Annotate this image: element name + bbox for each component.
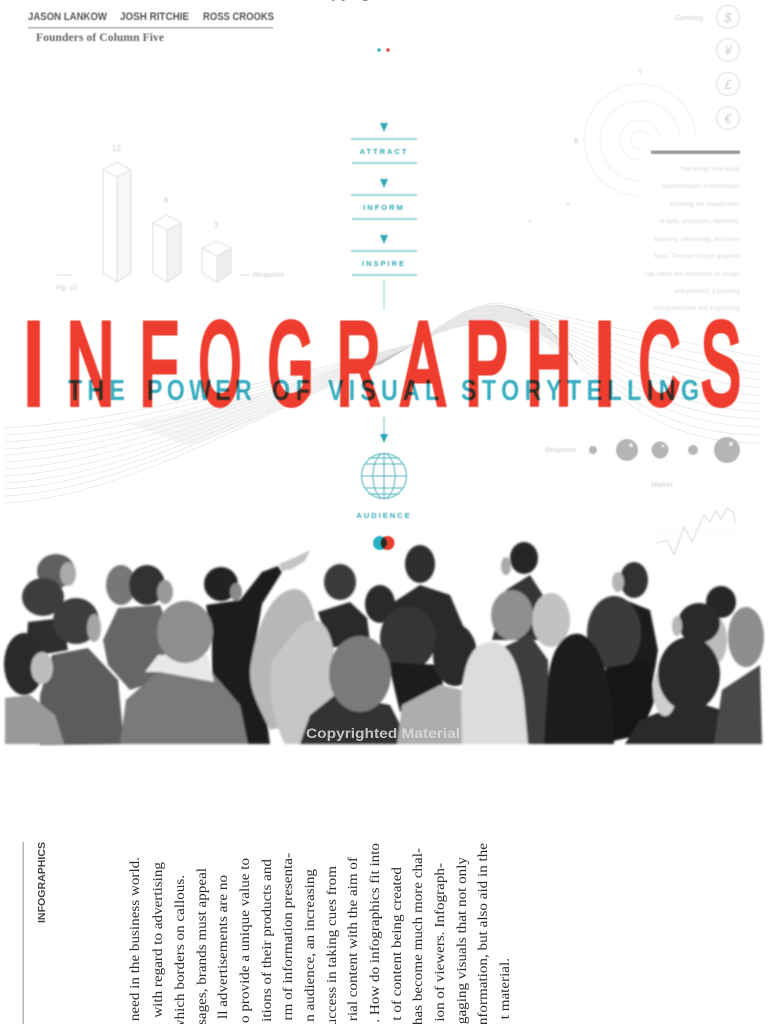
subtitle: the power of visual storytelling: POWER — [147, 373, 252, 407]
subtitle: the power of visual storytelling: THE — [68, 373, 125, 407]
side caption text: anatomy, chronology, and other — [654, 236, 740, 243]
title: INFOGRAPHICS: C — [639, 298, 680, 429]
icon: overlapping circles — [373, 536, 394, 550]
side caption text: representation of information — [661, 183, 741, 190]
dotted spiral chart: $ — [574, 138, 578, 145]
body text, rotated: o provide a unique value to — [238, 858, 253, 1023]
dotted spiral chart — [529, 69, 696, 222]
body text, rotated: nformation, but also aid in the — [476, 843, 491, 1024]
isometric bar chart: 6 — [164, 196, 169, 205]
title: INFOGRAPHICS: N — [66, 298, 114, 429]
currency legend — [675, 6, 740, 130]
isometric bar chart: Fig. 01 — [56, 285, 78, 292]
body text, rotated: need in the business world. — [128, 857, 143, 1021]
side caption text: and patterns, a puzzling — [674, 288, 741, 295]
body text, rotated — [128, 843, 513, 1024]
body text, rotated: t material. — [498, 958, 513, 1019]
currency legend: Currency — [675, 15, 704, 22]
flowing wave ribbon — [5, 303, 760, 503]
grey rule above side caption — [651, 150, 740, 154]
side caption text — [645, 166, 741, 312]
body text, rotated: . How do infographics fit into — [368, 843, 383, 1023]
title: INFOGRAPHICS: I — [593, 298, 617, 429]
women and middle row — [532, 593, 570, 647]
title: INFOGRAPHICS: R — [337, 298, 381, 429]
authors header — [28, 11, 274, 44]
title: INFOGRAPHICS: G — [268, 298, 314, 429]
title: INFOGRAPHICS: I — [22, 298, 46, 429]
authors header: JOSH RITCHIE — [120, 11, 189, 23]
body text, rotated: ll advertisements are no — [216, 875, 231, 1019]
bubble chart — [545, 437, 740, 463]
side caption text: facts. The use of such graphics — [654, 253, 740, 260]
body text, rotated: uccess in taking cues from — [325, 866, 340, 1024]
body text, rotated: sages, brands must appeal — [195, 868, 210, 1024]
currency legend: € — [724, 111, 732, 126]
body text, rotated: gaging visuals that not only — [455, 856, 470, 1024]
body text, rotated: t of content being created — [390, 867, 405, 1021]
title: INFOGRAPHICS: F — [139, 298, 178, 429]
body text, rotated: ion of viewers. Infograph- — [433, 863, 448, 1022]
side caption text: of data, processes, hierarchy, — [659, 218, 740, 225]
subtitle: the power of visual storytelling: VISUAL — [328, 373, 439, 407]
side caption text: comprehensive and engrossing — [654, 305, 741, 312]
body text, rotated: rm of information presenta- — [281, 853, 296, 1020]
currency legend: $ — [723, 10, 732, 25]
body text, rotated: with regard to advertising — [151, 862, 166, 1018]
side caption text: The design and visual — [680, 166, 740, 173]
isometric bar chart: 3 — [214, 221, 219, 230]
running head: INFOGRAPHICS: INFOGRAPHICS — [36, 842, 48, 923]
title: INFOGRAPHICS: O — [199, 298, 241, 429]
isometric bar chart: 12 — [112, 144, 121, 153]
vertical rule on interior page — [22, 842, 24, 1024]
isometric bar chart: Response — [253, 272, 285, 279]
back row — [37, 554, 75, 588]
authors header: ROSS CROOKS — [203, 11, 274, 23]
subtitle: the power of visual storytelling — [68, 373, 699, 407]
photo: audience of people looking up — [4, 542, 764, 745]
title: INFOGRAPHICS — [22, 298, 741, 429]
title: INFOGRAPHICS: P — [465, 298, 508, 429]
flow diagram: attract, inform, inspire: INFORM — [363, 203, 405, 212]
watermark over photo: Copyrighted Material — [306, 725, 460, 741]
currency legend: £ — [723, 77, 732, 92]
authors header: Founders of Column Five — [36, 32, 164, 44]
subtitle: the power of visual storytelling: STORYTELLING — [461, 373, 699, 407]
body text, rotated: rial content with the aim of — [346, 857, 361, 1021]
flow diagram: attract, inform, inspire: INSPIRE — [362, 259, 406, 268]
currency legend: ¥ — [724, 43, 733, 58]
dotted spiral chart: Y — [638, 69, 643, 76]
bubble chart: Response — [545, 447, 577, 454]
body text, rotated: itions of their products and — [260, 859, 275, 1022]
title: INFOGRAPHICS: A — [402, 298, 444, 429]
flow diagram: attract, inform, inspire: ATTRACT — [360, 147, 408, 156]
isometric bar chart — [56, 144, 285, 292]
body text, rotated: has become much more chal- — [411, 848, 426, 1024]
arrow down to audience — [380, 417, 388, 443]
body text, rotated: n audience, an increasing — [303, 869, 318, 1022]
side caption text: can utilize the dimension of visuals — [645, 271, 740, 278]
icon: globe — [362, 453, 406, 499]
subtitle: the power of visual storytelling: OF — [272, 373, 310, 407]
authors header: JASON LANKOW — [28, 11, 108, 23]
front row — [40, 648, 124, 745]
market line chart: Market — [651, 482, 672, 489]
market line chart — [651, 482, 740, 555]
audience label: AUDIENCE — [356, 511, 412, 520]
flow diagram: attract, inform, inspire — [351, 48, 417, 310]
title: INFOGRAPHICS: H — [526, 298, 572, 429]
side caption text: including the visualization — [670, 201, 741, 208]
